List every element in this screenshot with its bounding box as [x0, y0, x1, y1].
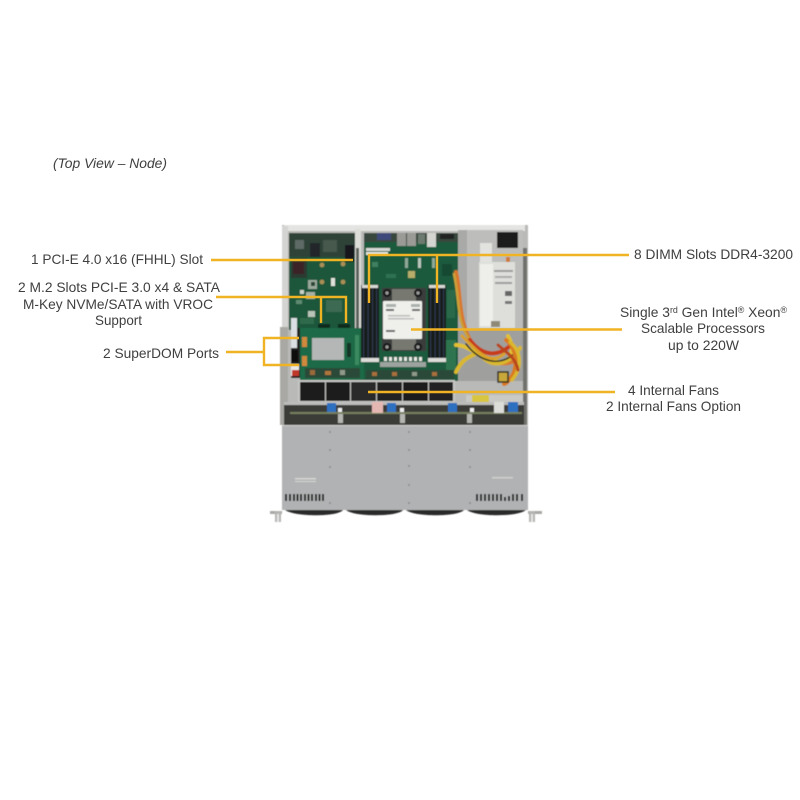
riser card board [289, 233, 356, 330]
callout: fans: 4 Internal Fans [628, 382, 719, 398]
callout: DIMM slots [369, 246, 793, 303]
main board [361, 233, 458, 381]
riser slot [355, 229, 361, 335]
connector bay [284, 402, 524, 425]
callout: SuperDOM ports: 2 SuperDOM Ports [103, 345, 219, 361]
CPU label [383, 301, 422, 339]
DIMM slots left [361, 285, 379, 362]
caption: top view: (Top View – Node) [53, 155, 167, 171]
power supply [458, 230, 523, 329]
callout: processor: Single 3 [620, 304, 671, 320]
callout: processor: ® [738, 305, 745, 315]
left rack ear [270, 511, 282, 522]
callout: M.2 slots: Support [95, 312, 142, 328]
callout: processor: ® [780, 305, 787, 315]
callout: processor: Scalable Processors [641, 320, 765, 336]
callout: SuperDOM ports [103, 338, 299, 365]
callout: PCI-E slot: 1 PCI-E 4.0 x16 (FHHL) Slot [31, 251, 203, 267]
front fans [285, 510, 526, 515]
callout: processor: Xeon [744, 304, 780, 320]
PSU label [479, 262, 515, 328]
fan row [298, 380, 455, 403]
left vent slots [285, 494, 324, 501]
lower left board with SuperDOM ports [291, 318, 366, 380]
callout: processor [411, 304, 787, 353]
PSU side bracket [466, 395, 523, 403]
callout: M.2 slots: M-Key NVMe/SATA with VROC [23, 296, 213, 312]
callout: M.2 slots: 2 M.2 Slots PCI-E 3.0 x4 & SATA [18, 279, 221, 295]
right rack ear [528, 511, 542, 522]
rear IO ports [377, 233, 391, 240]
DIMM slots right [428, 285, 446, 362]
callout: fans [368, 382, 741, 414]
callout: DIMM slots: 8 DIMM Slots DDR4-3200 [634, 246, 793, 262]
callout: fans: 2 Internal Fans Option [606, 398, 741, 414]
power socket [497, 232, 518, 248]
top cover [282, 425, 528, 510]
callout: processor: rd [670, 305, 678, 315]
callout: processor: up to 220W [668, 337, 740, 353]
server chassis photo [270, 225, 542, 522]
right vent slots [476, 494, 523, 501]
CPU socket [382, 288, 426, 351]
power cables [454, 272, 523, 384]
chassis base [282, 225, 528, 426]
callout: processor: Gen Intel [678, 304, 738, 320]
connector row [366, 357, 454, 379]
callout: M.2 slots [18, 279, 346, 328]
